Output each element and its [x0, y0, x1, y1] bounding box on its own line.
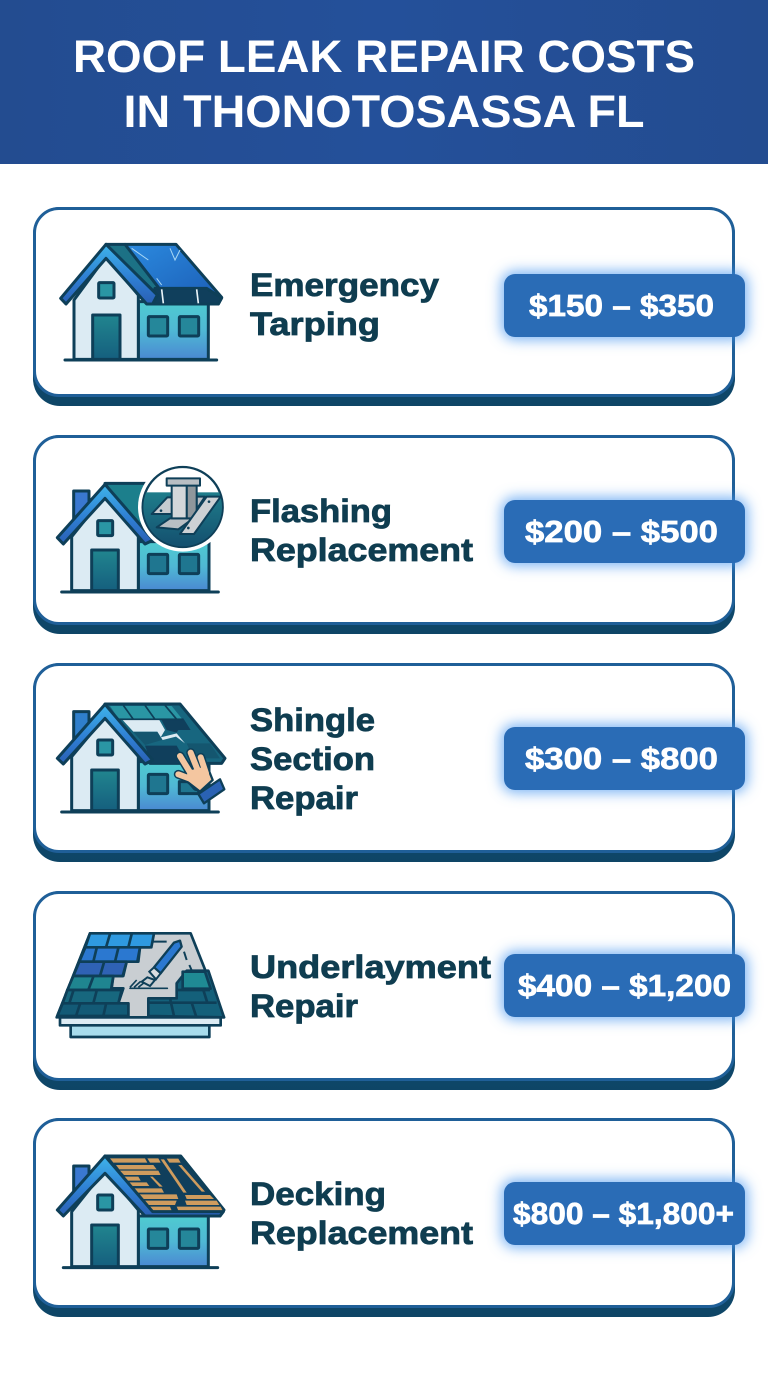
label: shingle section repair	[250, 702, 375, 816]
title: IN THONOTOSASSA FL	[124, 86, 644, 137]
label: emergency tarping: Tarping	[250, 306, 380, 342]
price: 800 to 1,800+: $800 – $1,800+	[513, 1196, 734, 1231]
price: 200 to 500	[504, 500, 745, 563]
label: flashing replacement: Replacement	[250, 532, 473, 568]
title	[0, 0, 768, 164]
price: 150 to 350	[504, 274, 745, 337]
label: flashing replacement: Flashing	[250, 493, 392, 529]
label: decking replacement: Replacement	[250, 1215, 473, 1251]
label: flashing replacement	[250, 493, 474, 568]
price: 400 to 1,200: $400 – $1,200	[518, 968, 731, 1003]
icon: house with flashing detail	[56, 466, 224, 594]
icon: house with shingle repair and hand	[56, 702, 226, 814]
label: underlayment repair: Underlayment	[250, 949, 491, 985]
price: 300 to 800: $300 – $800	[525, 741, 718, 776]
label: shingle section repair: Section	[250, 741, 375, 777]
label: underlayment repair	[250, 949, 492, 1024]
price: 800 to 1,800+	[504, 1182, 745, 1245]
panel: underlayment repair	[33, 891, 758, 1090]
title: ROOF LEAK REPAIR COSTS	[73, 31, 695, 82]
icon: house with exposed wood decking	[56, 1154, 226, 1270]
price: 300 to 800	[504, 727, 745, 790]
label: emergency tarping: Emergency	[250, 267, 439, 303]
panel: decking replacement	[33, 1118, 758, 1317]
hand	[178, 753, 213, 792]
panel: flashing replacement	[33, 435, 758, 634]
icon: house with blue tarp	[59, 242, 224, 362]
icon: roof section with underlayment and trowel	[55, 932, 226, 1038]
label: shingle section repair: Repair	[250, 780, 358, 816]
price: 200 to 500: $200 – $500	[525, 514, 718, 549]
label: shingle section repair: Shingle	[250, 702, 375, 738]
label: emergency tarping	[250, 267, 440, 342]
price: 150 to 350: $150 – $350	[529, 288, 714, 323]
panel: emergency tarping	[33, 207, 758, 406]
price: 400 to 1,200	[504, 954, 745, 1017]
label: underlayment repair: Repair	[250, 988, 358, 1024]
label: decking replacement: Decking	[250, 1176, 386, 1212]
label: decking replacement	[250, 1176, 474, 1251]
panel: shingle section repair	[33, 663, 758, 862]
